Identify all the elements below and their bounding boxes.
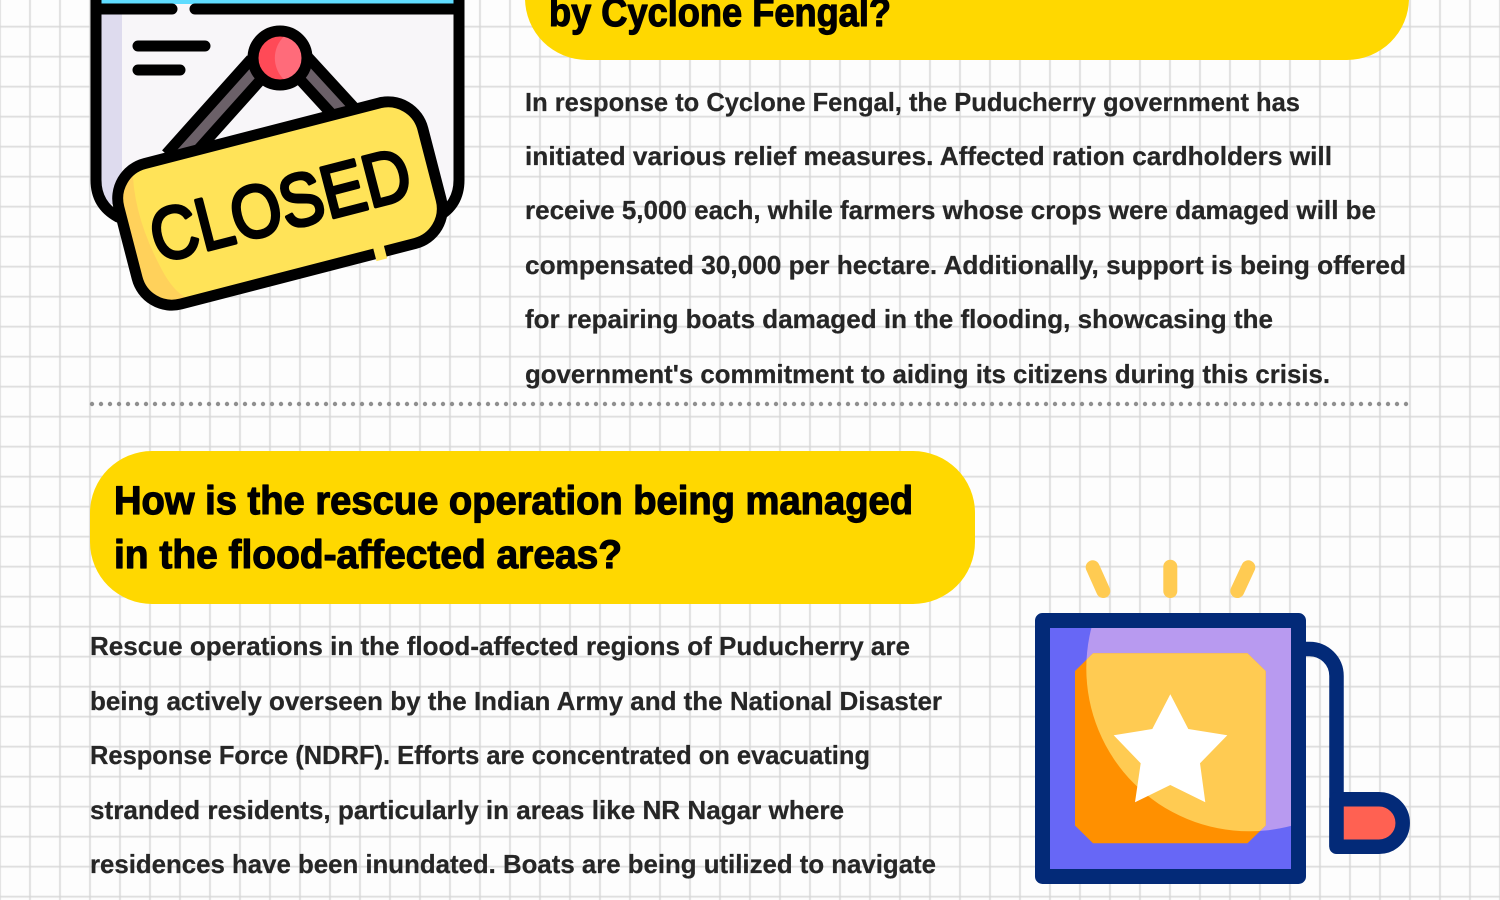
text block: rescue operation: Rescue operations in the flood-affected regions of Puducherry are	[90, 631, 910, 661]
text block: relief measures: receive 5,000 each, while farmers whose crops were damaged will be	[525, 195, 1376, 225]
heading: rescue operation pill: How is the rescue operation being managed	[114, 479, 913, 523]
heading: rescue operation pill: in the flood-affected areas?	[114, 533, 622, 577]
heading: relief measures pill	[525, 0, 1409, 60]
text block: rescue operation: Response Force (NDRF). Efforts are concentrated on evacuating	[90, 740, 870, 770]
icon: closed sign: CLOSED	[141, 131, 420, 278]
icon: closed sign	[96, 0, 459, 320]
text block: rescue operation	[90, 631, 942, 879]
text block: relief measures: for repairing boats damaged in the flooding, showcasing the	[525, 304, 1273, 334]
text block: relief measures	[525, 87, 1406, 389]
text block: relief measures: government's commitment to aiding its citizens during this crisis.	[525, 359, 1330, 389]
text block: relief measures: initiated various relief measures. Affected ration cardholders will	[525, 141, 1332, 171]
text block: rescue operation: residences have been inundated. Boats are being utilized to navigate	[90, 849, 936, 879]
icon: music box with star	[1035, 560, 1410, 884]
text block: relief measures: In response to Cyclone Fengal, the Puducherry government has	[525, 87, 1300, 117]
heading: rescue operation pill	[90, 451, 975, 604]
text block: rescue operation: stranded residents, particularly in areas like NR Nagar where	[90, 795, 844, 825]
text block: rescue operation: being actively overseen by the Indian Army and the National Disaster	[90, 686, 942, 716]
text block: relief measures: compensated 30,000 per hectare. Additionally, support is being offered	[525, 250, 1406, 280]
